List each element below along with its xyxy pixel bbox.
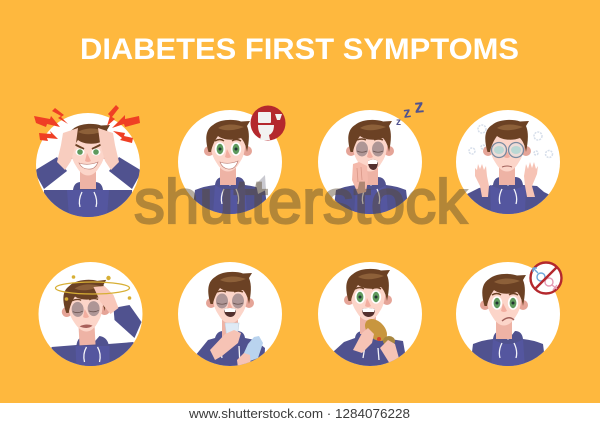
icon: raised left hand bbox=[475, 164, 489, 197]
icon: raised right hand bbox=[524, 162, 538, 197]
watermark: shutterstock bbox=[134, 168, 468, 237]
icon: water glass bbox=[224, 322, 240, 334]
panel: fatigue yawning: z bbox=[402, 104, 412, 122]
icon: pain lightning bolts bbox=[34, 105, 140, 143]
icon: toilet badge bbox=[250, 106, 286, 140]
panel: dizziness bbox=[38, 262, 142, 368]
title: DIABETES FIRST SYMPTOMS bbox=[80, 33, 519, 66]
icon: no sex symbols sign bbox=[530, 262, 562, 294]
panel: fatigue yawning: z bbox=[413, 96, 425, 118]
icon: blurred sparkles bbox=[469, 125, 552, 158]
panel: fatigue yawning bbox=[318, 96, 425, 214]
panel: low libido bbox=[456, 262, 562, 368]
footer text: www.shutterstock.com · 1284076228 bbox=[188, 406, 410, 421]
panel: blurred vision bbox=[456, 110, 560, 214]
footer bar bbox=[0, 403, 600, 423]
panel: hunger eating bbox=[318, 262, 422, 368]
panel: frequent urination bbox=[178, 106, 286, 214]
icon: water bottle bbox=[243, 336, 263, 361]
icon: burger bbox=[365, 319, 387, 341]
panel: headache bbox=[34, 105, 142, 217]
icon: dizzy halo and stars bbox=[56, 275, 131, 301]
panel: thirst bbox=[178, 262, 282, 368]
icon: sleep zzz: z bbox=[396, 117, 401, 128]
